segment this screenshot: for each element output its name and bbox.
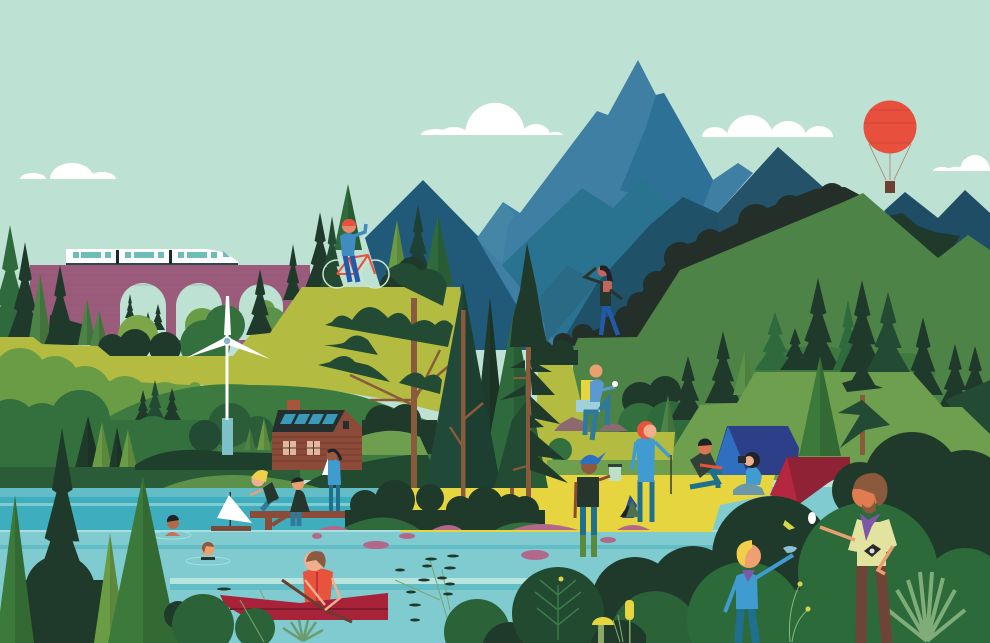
cloud: far left — [20, 163, 116, 179]
pine with branch fronds — [494, 243, 568, 502]
lake — [0, 487, 990, 643]
hot air balloon — [864, 100, 916, 193]
far right peaks — [860, 190, 990, 300]
yellow-green plateau — [535, 365, 675, 470]
foreground bushes row — [444, 496, 833, 643]
mid green bush mass — [0, 390, 217, 485]
rocks on plateau — [554, 417, 628, 431]
small meadow and bushes behind house — [362, 404, 437, 455]
butterflies — [783, 512, 816, 530]
fan plant under canoe — [283, 620, 323, 641]
wind turbine — [186, 296, 270, 455]
log cabin — [272, 400, 362, 470]
hillside forest — [755, 278, 990, 440]
tall green tree on terrace — [799, 356, 841, 456]
bush on plateau edge — [548, 438, 572, 462]
foreground bush row bottom left — [164, 594, 275, 643]
blonde girl leaning on jetty — [250, 470, 279, 510]
reed stems and leaves — [217, 554, 459, 642]
dark bushes above plateau — [530, 340, 578, 365]
red tent — [770, 457, 850, 505]
terrace meadow — [672, 372, 990, 480]
green hillside — [573, 193, 990, 470]
yellow-green hill — [0, 287, 470, 420]
left tree group behind viaduct — [0, 225, 303, 362]
dark right-hand forest mass — [832, 432, 990, 590]
blue tent — [712, 426, 799, 475]
scout taking a photo — [733, 452, 765, 495]
bright yellow ground — [400, 475, 775, 532]
pine on terrace — [838, 362, 890, 455]
bushes and trees under green hill — [618, 331, 757, 449]
cyclist with bicycle — [323, 219, 389, 288]
central mountain — [477, 60, 852, 350]
mountain-side trees above pine — [305, 184, 453, 297]
shoreline dark bands — [0, 450, 440, 488]
bushes behind turbine — [189, 403, 274, 452]
toy sailboat on water — [211, 492, 252, 531]
green strip behind yellow ground — [547, 460, 675, 477]
fern on bush — [535, 580, 581, 640]
cloud: centre right — [702, 115, 833, 137]
canoe with paddling boy — [220, 551, 388, 622]
boy seated on jetty — [290, 477, 310, 526]
jar on shore — [608, 464, 622, 481]
foreground trees left — [0, 428, 178, 643]
girl with walking stick and rubbish bag — [622, 421, 671, 522]
left mountain — [365, 180, 560, 350]
swimmer two — [186, 542, 230, 565]
scout with backpack holding flower — [576, 364, 618, 440]
shore rocks — [312, 524, 650, 560]
mushrooms and flowers — [558, 576, 810, 643]
trees in front of mid bush — [75, 416, 137, 468]
rubbish bags on shore — [620, 500, 640, 517]
trees and bushes through viaduct arches — [118, 294, 288, 370]
light green bushes — [0, 348, 205, 440]
bushes along green hill ridge — [550, 183, 860, 353]
bushes behind right ridge — [885, 213, 960, 262]
scout boy reaching to butterfly — [725, 540, 797, 643]
foreground dark bushes left — [20, 555, 105, 643]
large green bush behind scout leader — [687, 502, 990, 643]
scout in rubber boots wading — [575, 452, 610, 557]
jetty — [250, 511, 345, 530]
pine tree with flat canopies — [318, 263, 453, 488]
rolling dark green hill — [95, 384, 440, 480]
lantern and stick base — [668, 494, 674, 500]
girl with toy boat standing on jetty — [322, 450, 341, 511]
trees on rolling hill — [135, 380, 181, 420]
jetty bushes — [340, 480, 560, 530]
swimmer one — [153, 515, 191, 539]
hiker with binoculars on ridge — [585, 265, 622, 335]
viaduct — [30, 265, 310, 345]
tall centre trees — [425, 282, 548, 500]
cloud: centre with sun — [421, 103, 563, 135]
scout leader with camera — [820, 473, 897, 643]
fan palm leaf — [888, 572, 965, 641]
crouching scout — [690, 438, 722, 488]
train — [66, 249, 238, 265]
cloud: far right — [933, 155, 990, 171]
